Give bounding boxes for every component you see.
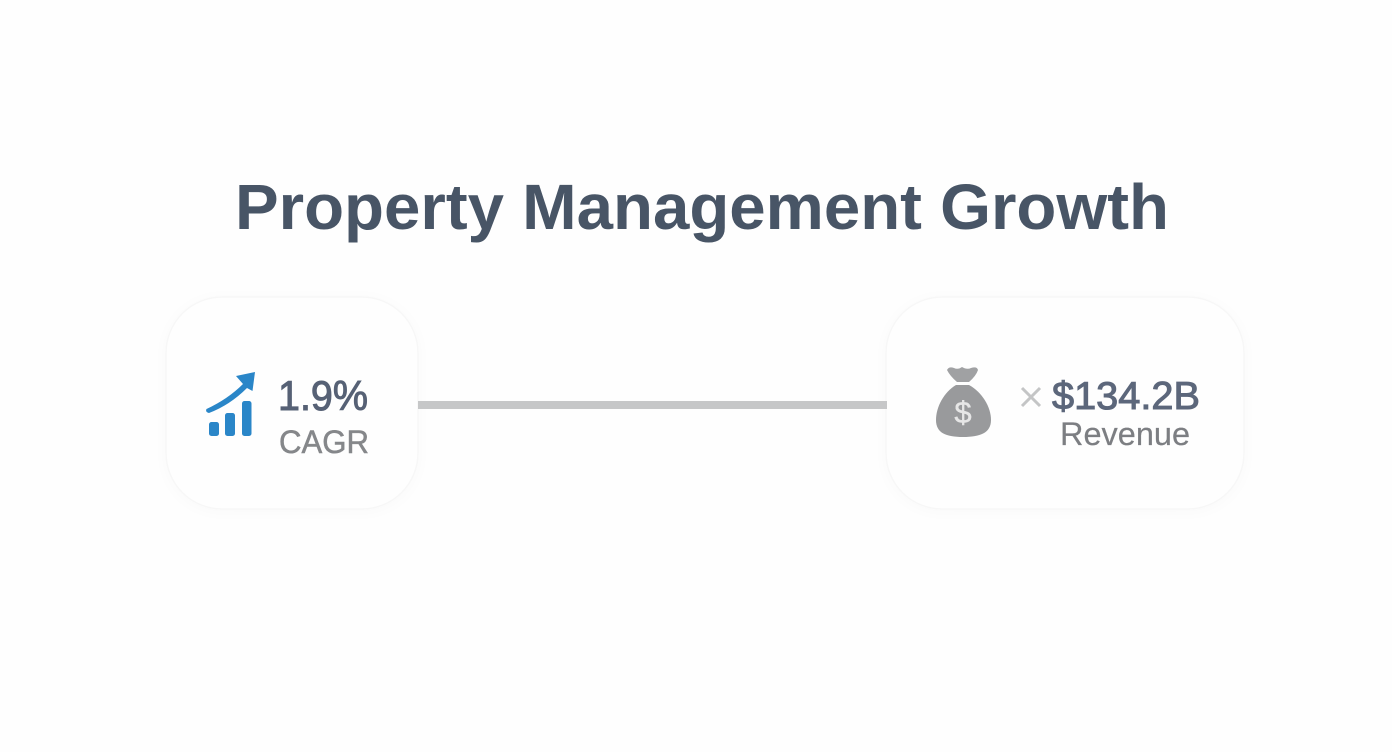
panel background: CAGR xyxy=(166,297,418,509)
icon: growth chart with arrow xyxy=(206,372,255,436)
revenue label: Revenue xyxy=(1060,416,1190,452)
icon: money bag: $ xyxy=(954,395,972,430)
revenue value: $134.2B xyxy=(1052,375,1200,418)
CAGR value: 1.9% xyxy=(278,372,368,419)
icon: money bag xyxy=(936,367,991,437)
CAGR label: CAGR xyxy=(279,424,369,460)
multiply sign xyxy=(1022,388,1040,406)
title: Property Management Growth xyxy=(235,171,1169,243)
panel: CAGR xyxy=(166,297,418,509)
panel background: revenue xyxy=(886,297,1244,509)
connector line xyxy=(418,401,887,409)
panel: revenue xyxy=(886,297,1244,509)
